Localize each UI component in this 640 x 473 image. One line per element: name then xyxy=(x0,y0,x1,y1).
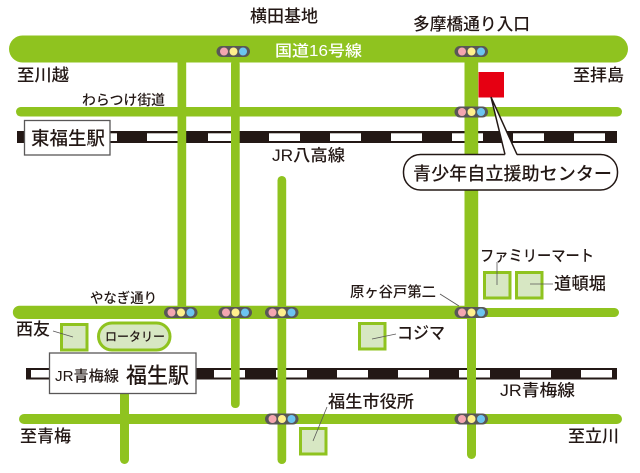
label: to haijima: 至拝島 xyxy=(573,66,624,85)
signal: south road 2 xyxy=(454,414,488,424)
landmark: kojima: コジマ xyxy=(397,324,445,343)
label: to tachikawa: 至立川 xyxy=(568,427,619,446)
landmark: seiyu: 西友 xyxy=(16,320,50,339)
rail: JR Hachiko line xyxy=(17,131,617,143)
label: yokota base: 横田基地 xyxy=(250,7,318,26)
road: warabi kaido xyxy=(16,107,622,116)
road: vertical 5 xyxy=(120,390,129,464)
landmark: dotonbori xyxy=(516,272,606,298)
signal: haragayato daini xyxy=(454,307,488,318)
rail: JR Ome line xyxy=(26,368,617,380)
road: yanagi dori xyxy=(13,306,619,319)
callout: youth support center: 青少年自立援助センター xyxy=(413,164,612,184)
signal: yanagi 3 xyxy=(265,307,298,318)
road: vertical 3 xyxy=(278,176,286,464)
signal: warabi kaido xyxy=(454,106,488,118)
landmark: family mart: ファミリーマート xyxy=(480,248,594,265)
road: south road xyxy=(19,414,622,424)
signal: yanagi 1 xyxy=(164,307,198,318)
label: yanagi dori: やなぎ通り xyxy=(90,290,157,306)
destination marker: red square xyxy=(478,72,504,98)
station: fussa xyxy=(50,353,196,394)
leader: haragayato daini xyxy=(440,294,459,306)
road: vertical 2 xyxy=(231,60,240,408)
landmark: rotary: ロータリー xyxy=(105,330,165,344)
label: to kawagoe: 至川越 xyxy=(17,66,69,85)
station: higashi-fussa xyxy=(24,120,110,155)
signal: route 16 west xyxy=(216,46,250,57)
label: tamabashi entrance: 多摩橋通り入口 xyxy=(413,15,530,34)
road: vertical 4 upper xyxy=(464,60,478,310)
landmark: fussa city hall xyxy=(300,392,414,454)
landmark: kojima xyxy=(360,324,445,349)
landmark: seiyu xyxy=(16,320,87,350)
landmark: dotonbori: 道頓堀 xyxy=(554,274,606,294)
label: JR Ome line: JR青梅線 xyxy=(500,381,576,400)
road: route 16 xyxy=(9,36,628,62)
label: warabi kaido: わらつけ街道 xyxy=(82,92,165,108)
signal: tamabashi xyxy=(454,46,488,57)
station: fussa: 福生駅 xyxy=(126,364,189,388)
landmark: family mart xyxy=(480,248,594,298)
label: JR Hachiko line: JR八高線 xyxy=(272,146,346,165)
road: vertical 4 lower xyxy=(467,305,476,459)
traffic signals xyxy=(164,46,488,424)
callout: youth support center xyxy=(404,97,618,190)
station: fussa: JR青梅線 xyxy=(55,368,119,385)
label: to ome: 至青梅 xyxy=(20,427,71,446)
label: route 16: 国道16号線 xyxy=(275,42,363,60)
label: haragayato daini: 原ヶ谷戸第二 xyxy=(350,283,436,301)
landmark: rotary xyxy=(98,323,170,350)
signal: south road 1 xyxy=(265,414,298,424)
road: vertical 1 xyxy=(178,60,186,310)
signal: yanagi 2 xyxy=(218,307,252,318)
landmark: fussa city hall: 福生市役所 xyxy=(328,392,414,412)
station: higashi-fussa: 東福生駅 xyxy=(31,128,105,149)
